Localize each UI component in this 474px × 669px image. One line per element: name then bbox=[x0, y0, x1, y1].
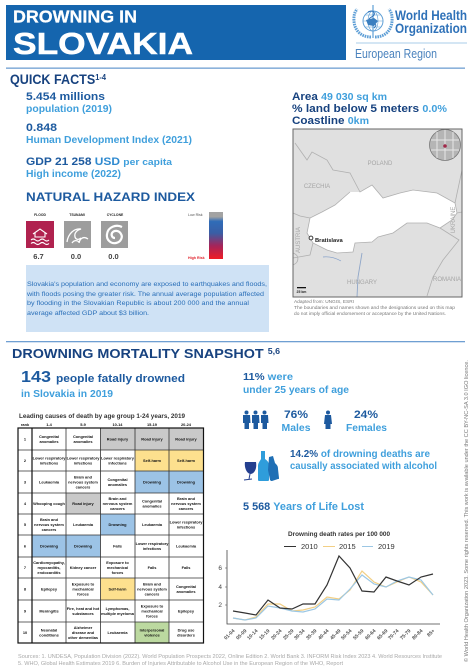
map note bbox=[294, 299, 456, 316]
table row 3: anomalies bbox=[108, 482, 127, 487]
line chart: drowning death rates: 65-69 bbox=[376, 628, 390, 641]
sources bbox=[18, 654, 442, 667]
line chart: drowning death rates: 30-34 bbox=[293, 628, 307, 641]
map note: Adapted from: UNGIS, ESRI bbox=[294, 299, 354, 304]
table row 3: Congenital bbox=[107, 477, 128, 482]
quick facts list: 0.848 bbox=[26, 122, 57, 134]
table row 10: Interpersonal bbox=[140, 628, 164, 632]
table row 9: substances bbox=[72, 611, 94, 616]
country facts: Coastline 0km bbox=[292, 115, 369, 127]
table row 8: forces bbox=[77, 592, 89, 596]
heading: quick facts: 1-4 bbox=[95, 73, 107, 82]
callout: hazard summary: by flooding in the Slovakian Republic is about 200 000 and the annual bbox=[27, 300, 250, 307]
table row 1: Congenital bbox=[73, 434, 93, 439]
hazard: flood bbox=[26, 213, 54, 261]
table row 10: Neonatal bbox=[41, 628, 57, 632]
quick facts list: 5.454 millions bbox=[26, 91, 105, 103]
table title: Leading causes of death by age group 1-24 years, 2019 bbox=[19, 414, 186, 420]
table row 9: Fire, heat and hot bbox=[67, 606, 100, 611]
table row 8: Exposure to bbox=[72, 582, 95, 586]
table row 6: Drowning bbox=[74, 544, 93, 548]
table row 10: Drug use bbox=[178, 628, 195, 632]
table row 2 bbox=[24, 456, 196, 466]
stat: 143 drowned bbox=[21, 369, 185, 400]
heading: drowning mortality snapshot: 5,6 bbox=[268, 347, 281, 356]
heading: drowning mortality snapshot: DROWNING MORTALITY SNAPSHOT bbox=[12, 346, 240, 361]
stat: under 25 bbox=[243, 372, 349, 396]
line chart: drowning death rates: 2 bbox=[218, 602, 222, 609]
map of Slovakia: Bratislava bbox=[315, 238, 343, 244]
table row 9 bbox=[24, 604, 195, 618]
stat: alcohol: causally associated with alcohol bbox=[290, 461, 437, 472]
stat: males bbox=[282, 409, 311, 434]
table row 7: Cardiomyopathy, bbox=[33, 560, 65, 565]
map of Slovakia: POLAND bbox=[368, 161, 393, 167]
table row 2: Self-harm bbox=[143, 458, 162, 463]
table row 4: cancers bbox=[110, 506, 125, 511]
map of Slovakia: UKRAINE bbox=[451, 207, 457, 233]
line chart: drowning death rates: 75-79 bbox=[399, 628, 413, 641]
table row 8: Congenital bbox=[176, 584, 196, 589]
line chart: drowning death rates: 85+ bbox=[426, 628, 436, 638]
callout: hazard summary: with floods posing the greater risk. The annual average population affected bbox=[26, 291, 264, 298]
hazard: cyclone: 0.0 bbox=[108, 252, 119, 261]
table row 1: Road injury bbox=[141, 436, 164, 442]
table row 5: 5 bbox=[24, 522, 27, 527]
table row 4: Brain and bbox=[109, 496, 127, 501]
table row 9: multiple myeloma bbox=[101, 611, 135, 616]
table: leading causes of death: 15-19 bbox=[147, 422, 158, 427]
table row 4 bbox=[24, 496, 201, 511]
map of Slovakia: HUNGARY bbox=[347, 280, 377, 286]
table row 6: Leukaemia bbox=[176, 544, 197, 548]
table row 7: Kidney cancer bbox=[70, 565, 97, 570]
table row 1: 1 bbox=[24, 436, 27, 442]
stat: under 25: under 25 years of age bbox=[243, 385, 349, 396]
line chart: drowning death rates: 10-14 bbox=[246, 628, 260, 641]
table row 1: Congenital bbox=[39, 434, 59, 439]
stat: males: Males bbox=[282, 422, 311, 434]
country facts bbox=[292, 91, 447, 127]
table: leading causes of death bbox=[18, 422, 204, 643]
table row 4: Congenital bbox=[142, 498, 162, 504]
table row 3: nervous system bbox=[68, 480, 98, 484]
table row 4: cancers bbox=[179, 506, 193, 511]
table row 2: Lower respiratory bbox=[67, 456, 100, 460]
table row 1: anomalies bbox=[39, 439, 59, 444]
quick facts list: Human Development Index (2021) bbox=[26, 135, 192, 146]
table row 3 bbox=[24, 474, 196, 490]
map of Slovakia: 25 km bbox=[296, 290, 306, 294]
table row 8: Self-harm bbox=[109, 586, 127, 592]
table row 5: Leukaemia bbox=[142, 522, 163, 527]
table row 2: infections bbox=[108, 460, 127, 466]
stat: 143 drowned: people fatally drowned bbox=[56, 373, 185, 385]
table row 5: infections bbox=[177, 524, 195, 530]
heading: quick facts: QUICK FACTS bbox=[10, 72, 102, 87]
risk gradient scale: High Risk bbox=[188, 256, 205, 260]
header banner bbox=[6, 5, 346, 61]
table row 3: Leukaemia bbox=[39, 480, 60, 484]
map of Slovakia: AUSTRIA bbox=[296, 227, 302, 253]
table row 8: 8 bbox=[24, 586, 27, 592]
risk gradient scale: Low Risk bbox=[188, 213, 203, 217]
table row 10: other dementias bbox=[68, 635, 98, 640]
table: leading causes of death: 20-24 bbox=[181, 422, 192, 427]
line chart: drowning death rates: 55-59 bbox=[352, 628, 366, 641]
quick facts list: High income (2022) bbox=[26, 169, 121, 180]
line chart: drowning death rates: 35-39 bbox=[305, 628, 319, 641]
stat: females: Females bbox=[346, 422, 387, 434]
table row 7: mechanical bbox=[107, 565, 128, 570]
sources: Sources: 1. UNDESA, Population Division (2022). World Population Prospects 2022, Online Edition 2. World Bank 3. INFORM Risk Index 2023 4. World Resources Institute bbox=[18, 654, 442, 660]
table row 5: Leukaemia bbox=[73, 522, 94, 527]
table row 8 bbox=[24, 582, 196, 596]
table row 9: Lymphomas, bbox=[106, 606, 129, 611]
table row 7 bbox=[24, 560, 190, 575]
table row 2: 2 bbox=[24, 458, 27, 463]
table row 9: mechanical bbox=[141, 608, 163, 614]
table row 5: Brain and bbox=[40, 517, 59, 522]
table row 2: Lower respiratory bbox=[101, 456, 135, 460]
table row 2: infections bbox=[40, 460, 58, 466]
line chart: drowning death rates: 45-49 bbox=[329, 628, 343, 641]
table row 5: nervous system bbox=[34, 522, 64, 527]
table row 8: anomalies bbox=[176, 589, 196, 594]
table row 2: Self-harm bbox=[177, 458, 196, 463]
table row 10: disease and bbox=[72, 630, 95, 635]
table: leading causes of death: 1-4 bbox=[46, 422, 53, 427]
table row 5 bbox=[24, 517, 203, 532]
hazard: cyclone: CYCLONE bbox=[107, 213, 124, 217]
table: leading causes of death: 10-14 bbox=[113, 422, 123, 427]
table: leading causes of death: 5-9 bbox=[80, 422, 87, 427]
line chart: drowning death rates: Drowning death rates per 100 000 bbox=[288, 532, 391, 538]
map of Slovakia: ROMANIA bbox=[433, 277, 461, 283]
table row 7: Exposure to bbox=[106, 560, 129, 565]
stat: females: 24% bbox=[354, 409, 378, 421]
map of Slovakia bbox=[293, 129, 462, 297]
line chart: drowning death rates bbox=[218, 532, 440, 641]
quick facts list: GDP 21 258 USD per capita bbox=[26, 156, 173, 168]
table row 6: Lower respiratory bbox=[136, 541, 169, 546]
table row 3: Drowning bbox=[177, 480, 196, 484]
line chart: drowning death rates: 25-29 bbox=[282, 628, 296, 641]
table row 9: Exposure to bbox=[141, 604, 164, 608]
table row 3: cancers bbox=[76, 484, 90, 490]
table row 7: 7 bbox=[24, 565, 26, 570]
table row 1: Road injury bbox=[175, 436, 198, 442]
stat: 143 drowned: 143 bbox=[21, 369, 51, 386]
table row 9: forces bbox=[146, 614, 158, 618]
table row 4: 4 bbox=[24, 501, 27, 506]
table row 6: Falls bbox=[113, 544, 122, 548]
line chart: drowning death rates: 40-44 bbox=[317, 628, 331, 641]
stat: alcohol: 14.2% of drowning deaths are bbox=[290, 449, 430, 460]
table row 8: Epilepsy bbox=[41, 586, 58, 592]
table row 4: Whooping cough bbox=[33, 501, 66, 506]
table row 8: nervous system bbox=[137, 586, 167, 592]
table row 4: nervous system bbox=[103, 501, 133, 506]
line chart: drowning death rates: 2010 bbox=[301, 542, 318, 551]
line chart: drowning death rates: 4 bbox=[218, 584, 222, 591]
table row 10 bbox=[23, 625, 195, 640]
hazard: tsunami bbox=[64, 213, 91, 261]
stat: males: 76% bbox=[284, 409, 308, 421]
table: leading causes of death: rank bbox=[21, 422, 30, 427]
sources: 5. WHO, Global Health Estimates 2019 6. Burden of Injuries Attributable to Alcohol Use in the European Region of the WHO, Report bbox=[18, 661, 343, 667]
table row 2: Lower respiratory bbox=[33, 456, 66, 460]
header banner: SLOVAKIA bbox=[13, 26, 193, 61]
stat: alcohol bbox=[290, 449, 437, 472]
line chart: drowning death rates: 2015 bbox=[339, 542, 356, 551]
stat: females bbox=[346, 409, 387, 434]
quick facts list bbox=[26, 91, 192, 180]
table row 8: cancers bbox=[145, 592, 159, 596]
map note: do not imply official endorsement or acceptance by the United Nations. bbox=[294, 311, 446, 316]
table row 7: Falls bbox=[182, 565, 190, 570]
callout: hazard summary: average affected GDP about $3 billion. bbox=[27, 310, 149, 317]
table row 10: Alzheimer bbox=[74, 625, 93, 630]
table row 5: Lower respiratory bbox=[170, 520, 203, 524]
table row 9: Epilepsy bbox=[178, 608, 195, 614]
country facts: % land below 5 meters 0.0% bbox=[292, 103, 447, 115]
table row 7: forces bbox=[112, 570, 123, 575]
hazard: flood: 6.7 bbox=[33, 252, 44, 261]
WHO logo bbox=[354, 5, 467, 61]
table row 4: Road injury bbox=[72, 501, 95, 506]
line chart: drowning death rates: 60-64 bbox=[364, 628, 378, 641]
table row 4: Brain and bbox=[177, 496, 196, 501]
line chart: drowning death rates: 2019 bbox=[378, 542, 395, 551]
line chart: drowning death rates: 01-04 bbox=[223, 628, 237, 641]
line chart: drowning death rates: 15-19 bbox=[258, 628, 272, 641]
table row 9: 9 bbox=[24, 608, 27, 614]
table row 2: infections bbox=[74, 460, 92, 466]
line chart: drowning death rates: 05-09 bbox=[235, 628, 249, 641]
country facts: Area 49 030 sq km bbox=[292, 91, 387, 103]
hazard: tsunami: TSUNAMI bbox=[69, 213, 85, 217]
table row 3: 3 bbox=[24, 480, 27, 484]
table row 6 bbox=[24, 541, 197, 551]
hazard: tsunami: 0.0 bbox=[71, 252, 81, 261]
table row 1: Road injury bbox=[107, 436, 129, 442]
header banner: DROWNING IN bbox=[13, 6, 137, 26]
table row 7: Falls bbox=[148, 565, 156, 570]
table row 8: Brain and bbox=[143, 582, 162, 586]
stat: years of life lost: 5 568 Years of Life Lost bbox=[243, 501, 364, 513]
hazard: cyclone bbox=[101, 213, 128, 261]
table row 3: Brain and bbox=[74, 474, 93, 480]
risk gradient scale bbox=[188, 212, 223, 260]
table row 6: infections bbox=[143, 546, 161, 551]
table row 5: Drowning bbox=[109, 522, 127, 527]
table row 6: Drowning bbox=[40, 544, 59, 548]
WHO logo: European Region bbox=[355, 47, 437, 61]
line chart: drowning death rates: 80-84 bbox=[411, 628, 425, 641]
line chart: drowning death rates: 50-54 bbox=[340, 628, 354, 641]
table row 1: anomalies bbox=[73, 439, 93, 444]
line chart: drowning death rates: 70-74 bbox=[387, 628, 401, 641]
table row 10: violence bbox=[144, 632, 161, 638]
table row 10: conditions bbox=[39, 632, 59, 638]
callout: hazard summary: Slovakia's population and economy are exposed to earthquakes and floods, bbox=[27, 281, 267, 288]
table row 9: Meningitis bbox=[39, 608, 59, 614]
icon: wine glass and bottles bbox=[244, 451, 279, 481]
stat: 143 drowned: in Slovakia in 2019 bbox=[21, 389, 113, 400]
table row 3: Drowning bbox=[143, 480, 162, 484]
hazard: flood: FLOOD bbox=[34, 213, 46, 217]
map note: The boundaries and names shown and the designations used on this map bbox=[294, 305, 456, 310]
table row 7: endocarditis bbox=[37, 570, 61, 575]
line chart: drowning death rates: 20-24 bbox=[270, 628, 284, 641]
quick facts list: population (2019) bbox=[26, 104, 112, 115]
copyright notice: © World Health Organization 2023. Some rights reserved. This work is available under the CC BY-NC-SA 3.0 IGO licence. bbox=[463, 360, 470, 662]
icon: female figure bbox=[324, 410, 332, 429]
table row 10: disorders bbox=[177, 632, 195, 638]
stat: under 25: 11% were bbox=[243, 372, 293, 383]
heading: natural hazard index: NATURAL HAZARD INDEX bbox=[26, 190, 195, 204]
table row 10: 10 bbox=[23, 630, 27, 635]
map of Slovakia: CZECHIA bbox=[304, 184, 330, 190]
table row 10: Leukaemia bbox=[107, 630, 128, 635]
table row 6: 6 bbox=[24, 544, 27, 548]
table row 4: nervous system bbox=[171, 501, 201, 506]
icon: three male figures bbox=[243, 410, 268, 429]
table row 8: mechanical bbox=[72, 586, 94, 592]
line chart: drowning death rates: 6 bbox=[218, 565, 222, 572]
table row 7: myocarditis, bbox=[38, 565, 60, 570]
table row 5: cancers bbox=[42, 527, 56, 532]
callout: hazard summary bbox=[26, 265, 269, 332]
table row 4: anomalies bbox=[142, 504, 162, 508]
table row 1 bbox=[24, 434, 198, 444]
